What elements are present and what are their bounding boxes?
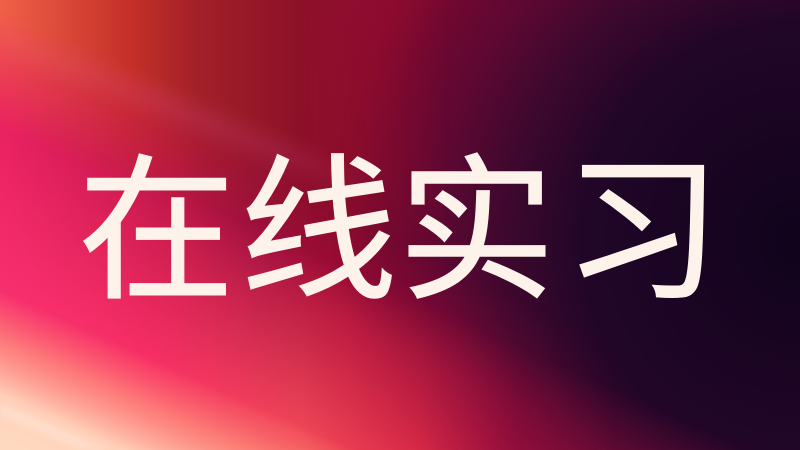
title text: 习: [564, 145, 721, 320]
title text: 在: [78, 145, 235, 320]
title text: 线: [240, 145, 397, 320]
title text: 实: [398, 145, 555, 320]
title text: [78, 145, 721, 320]
